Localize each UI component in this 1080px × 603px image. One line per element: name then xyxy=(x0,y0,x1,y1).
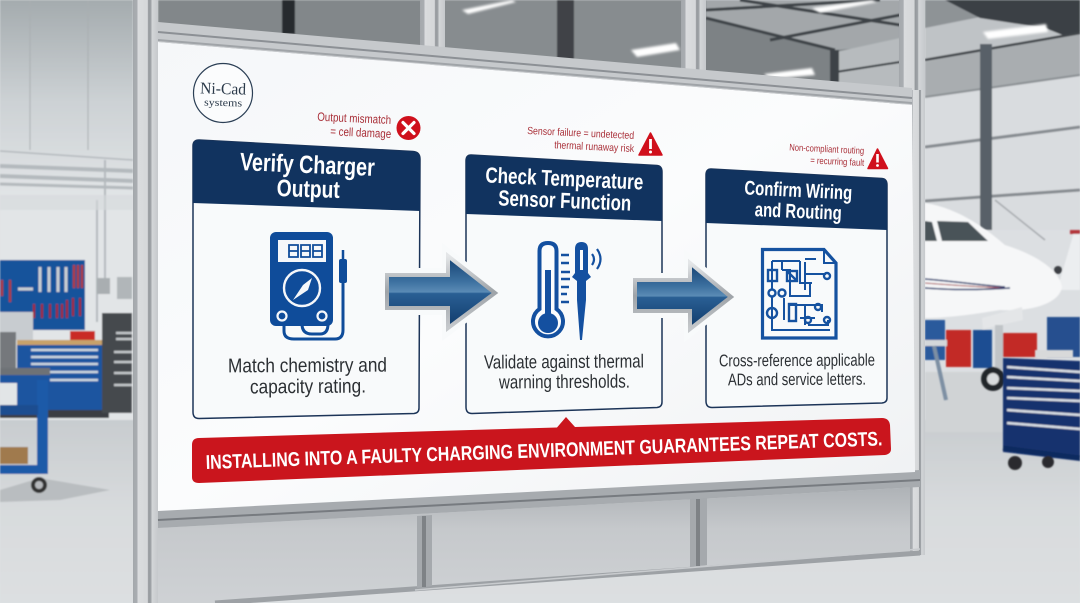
logo: Ni-Cad systems: systems xyxy=(204,98,242,109)
card 2: check temperature sensor function: warning thresholds. xyxy=(498,372,630,393)
warning: sensor failure xyxy=(527,125,662,155)
card 1: verify charger output xyxy=(193,140,420,418)
card 1: verify charger output: Output xyxy=(276,175,340,204)
card 2: check temperature sensor function: Sensor Function xyxy=(498,185,632,216)
arrow: step 2 to step 3 xyxy=(633,260,734,332)
icon: multimeter xyxy=(270,232,347,339)
arrow: step 1 to step 2 xyxy=(385,253,498,331)
warning: output mismatch xyxy=(317,110,420,141)
card 2: check temperature sensor function: Check Temperature xyxy=(485,162,644,195)
card 3: confirm wiring and routing: Cross-reference applicable xyxy=(719,351,875,370)
icon: thermometer and sensor probe xyxy=(533,242,600,340)
card 1: verify charger output: Match chemistry and xyxy=(228,355,387,377)
warning: sensor failure: thermal runaway risk xyxy=(554,139,635,155)
logo: Ni-Cad systems xyxy=(194,64,252,122)
warning: non-compliant routing: = recurring fault xyxy=(810,155,865,169)
warning: output mismatch: Output mismatch xyxy=(317,110,391,127)
card 3: confirm wiring and routing: Confirm Wiring xyxy=(744,177,853,205)
warning: non-compliant routing: Non-compliant routing xyxy=(789,142,864,157)
tool cabinet xyxy=(1003,350,1080,470)
warning: non-compliant routing xyxy=(789,142,888,169)
card 3: confirm wiring and routing xyxy=(706,169,887,408)
aircraft xyxy=(925,203,1080,400)
sign board xyxy=(158,42,915,511)
warning: output mismatch: = cell damage xyxy=(330,124,392,141)
logo: Ni-Cad systems: Ni-Cad xyxy=(200,78,247,99)
card 1: verify charger output: Verify Charger xyxy=(239,148,376,182)
card 2: check temperature sensor function xyxy=(466,155,662,414)
ceiling lights xyxy=(462,0,1048,79)
card 2: check temperature sensor function: Validate against thermal xyxy=(484,351,644,374)
sign frame xyxy=(133,0,925,603)
card 1: verify charger output: capacity rating. xyxy=(250,375,366,399)
icon: wiring schematic document xyxy=(762,250,836,338)
warning: sensor failure: Sensor failure = undetected xyxy=(527,125,635,142)
card 3: confirm wiring and routing: and Routing xyxy=(754,199,842,225)
callout banner: repeat costs warning: INSTALLING INTO A FAULTY CHARGING ENVIRONMENT GUARANTEES REPEAT COSTS. xyxy=(205,428,883,474)
callout banner: repeat costs warning xyxy=(192,417,891,483)
card 3: confirm wiring and routing: ADs and service letters. xyxy=(728,370,866,389)
